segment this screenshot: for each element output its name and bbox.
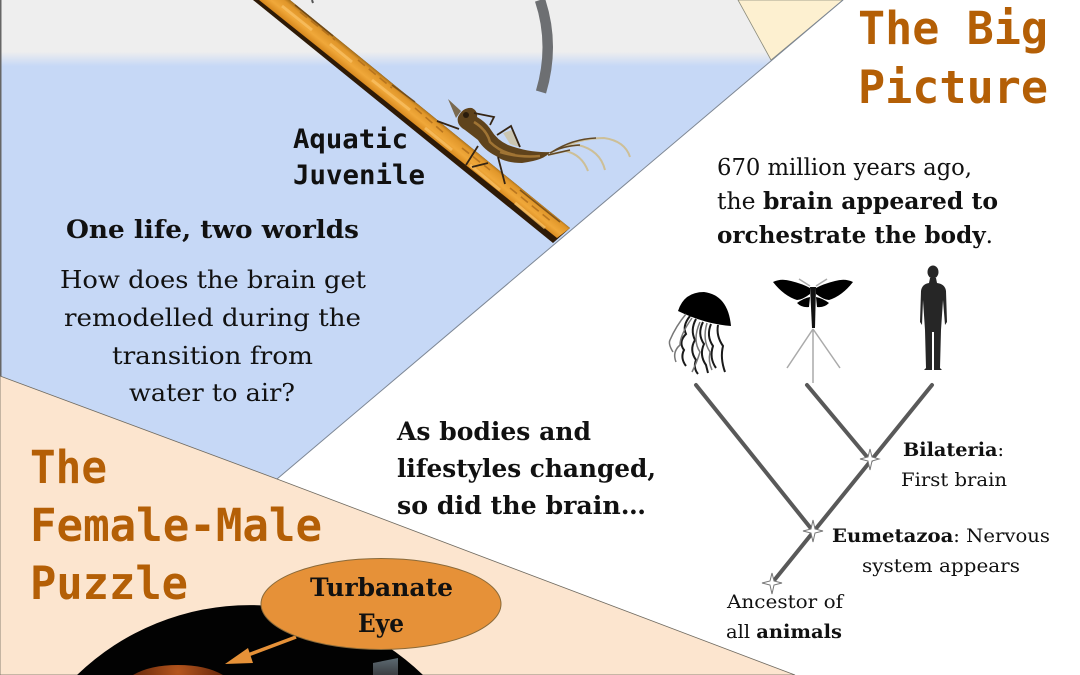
panel: cream corner: [738, 0, 843, 60]
arrow: to turbanate eye: [225, 637, 296, 664]
label: ancestor of all animals: all animals: [726, 621, 842, 643]
text block: brain remodelling question: [60, 266, 366, 407]
callout: turbanate eye: Eye: [358, 609, 404, 638]
heading: the big picture: The Big: [858, 2, 1048, 55]
heading: one life, two worlds: One life, two worlds: [66, 215, 359, 244]
label: aquatic juvenile: Aquatic: [293, 124, 408, 155]
text block: brain remodelling question: remodelled during the: [64, 304, 361, 332]
chart: phylogenetic tree: [696, 385, 932, 594]
text block: 670 million years ago: the brain appeared to: [717, 188, 998, 215]
node marker: ancestor: [762, 573, 782, 594]
heading: the female-male puzzle: [30, 441, 322, 610]
text block: brain remodelling question: water to air?: [129, 379, 295, 407]
text block: brain remodelling question: How does the brain get: [60, 266, 366, 294]
panel: female-male puzzle: [0, 376, 795, 675]
callout: turbanate eye: Turbanate: [310, 573, 453, 602]
icon: jellyfish: [669, 292, 731, 374]
icon: adult mayfly silhouette: [773, 279, 853, 383]
left border: [0, 0, 2, 675]
label: eumetazoa: [832, 525, 1050, 577]
label: ancestor of all animals: Ancestor of: [726, 591, 845, 613]
heading: the female-male puzzle: The: [30, 441, 107, 494]
heading: the big picture: [858, 2, 1048, 114]
label: ancestor of all animals: [726, 591, 845, 643]
heading: the big picture: Picture: [858, 61, 1048, 114]
node marker: eumetazoa: [803, 520, 823, 542]
label: bilateria: Bilateria:: [903, 439, 1004, 461]
node marker: bilateria: [860, 449, 879, 470]
label: bilateria: First brain: [901, 469, 1007, 491]
heading: the female-male puzzle: Puzzle: [30, 557, 188, 610]
photo: turbanate eye micrograph: [77, 605, 423, 675]
icon: aquatic juvenile mayfly: [437, 99, 630, 184]
text block: brain remodelling question: transition from: [112, 342, 313, 370]
text block: 670 million years ago: 670 million years ago,: [717, 155, 972, 181]
divider edge of blue panel: [277, 0, 843, 479]
text block: bodies and lifestyles: lifestyles changed,: [397, 454, 656, 483]
label: eumetazoa: system appears: [862, 555, 1020, 577]
label: aquatic juvenile: Juvenile: [293, 160, 425, 191]
icon: wooden branch: [253, 0, 570, 243]
label: bilateria: [901, 439, 1007, 491]
text block: 670 million years ago: [717, 155, 998, 249]
icon: grey arc: [540, 0, 548, 92]
panel: one life, two worlds: [0, 0, 843, 479]
text block: bodies and lifestyles: [396, 417, 656, 520]
callout: turbanate eye: [261, 558, 501, 650]
heading: the female-male puzzle: Female-Male: [30, 499, 322, 552]
label: aquatic juvenile: [293, 124, 425, 191]
icon: human silhouette: [920, 266, 947, 370]
text block: bodies and lifestyles: As bodies and: [396, 417, 591, 446]
text block: 670 million years ago: orchestrate the body.: [717, 222, 993, 249]
text block: bodies and lifestyles: so did the brain…: [397, 491, 646, 520]
label: eumetazoa: Eumetazoa: Nervous: [832, 525, 1050, 547]
